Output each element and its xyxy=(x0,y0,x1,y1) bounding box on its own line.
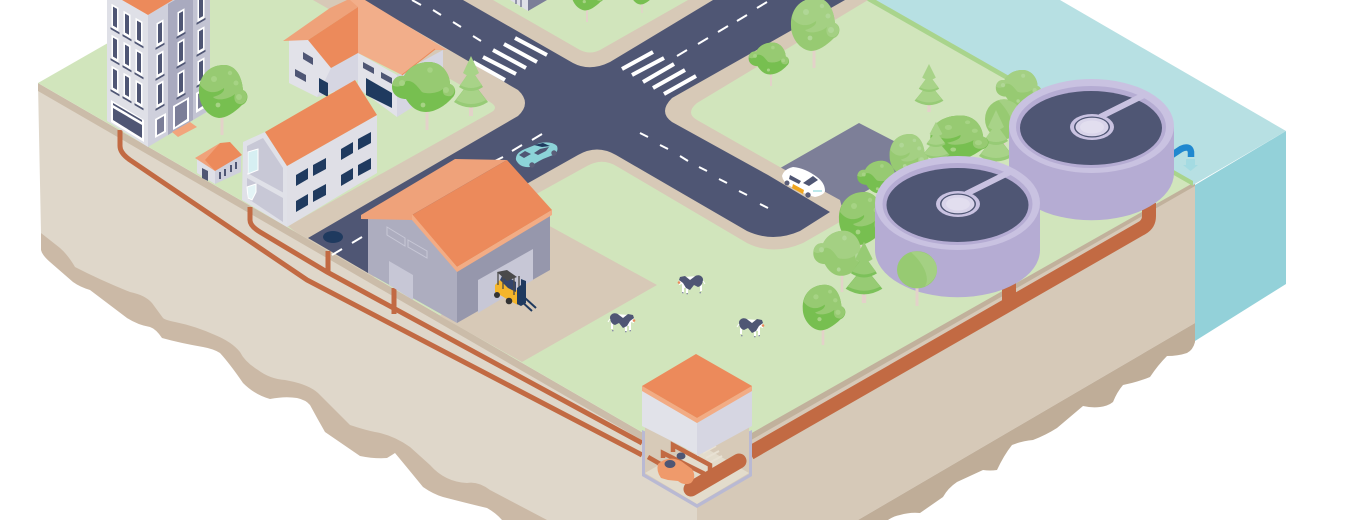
trees: front of tanks xyxy=(803,231,937,345)
section house windows xyxy=(296,132,371,212)
villa door xyxy=(319,78,328,97)
warehouse xyxy=(361,159,552,323)
stairs xyxy=(703,446,722,463)
garden shed xyxy=(195,142,242,184)
pump house roof xyxy=(642,354,752,418)
villa windows xyxy=(295,52,392,84)
right wall top band xyxy=(697,179,1195,471)
pine: villa front xyxy=(454,56,488,116)
manhole xyxy=(323,231,343,243)
pump chamber floor xyxy=(645,443,749,504)
warehouse roof right xyxy=(412,160,552,267)
section house roof xyxy=(265,80,377,166)
tree cluster behind tanks xyxy=(839,70,1041,262)
toilet xyxy=(247,184,256,200)
water basin side xyxy=(1195,131,1286,341)
apartment doormat xyxy=(172,122,197,137)
tree: beside apartment xyxy=(199,65,247,135)
suction pipes xyxy=(648,445,710,479)
shopfront xyxy=(111,100,144,142)
pine: centre field xyxy=(915,64,943,112)
apartment left windows xyxy=(110,3,144,110)
section house cutaway xyxy=(242,132,287,227)
cow: centre xyxy=(678,275,705,294)
pump body xyxy=(657,459,694,484)
pipe branch: warehouse xyxy=(392,288,396,314)
car: white taxi xyxy=(782,167,825,198)
road dashes xyxy=(332,0,768,255)
crosswalk: upper left xyxy=(473,38,547,80)
trees: top block xyxy=(571,0,655,22)
bank strip along water xyxy=(866,0,1193,186)
section house wall xyxy=(287,115,377,227)
main pressure pipe xyxy=(750,203,1149,453)
tree: villa front xyxy=(392,62,455,130)
villa roof xyxy=(283,0,365,41)
cow: right xyxy=(737,318,764,337)
cow: left xyxy=(608,313,635,332)
pipe riser to tank xyxy=(1002,283,1016,305)
pump station xyxy=(642,354,752,508)
pump motors xyxy=(664,460,676,468)
ground surface xyxy=(38,0,1193,464)
warehouse windows xyxy=(387,227,427,258)
outflow pipe into water xyxy=(1172,148,1198,171)
roads xyxy=(308,0,845,273)
settling tank: rear xyxy=(1009,79,1174,220)
tree: upper road small xyxy=(749,42,789,86)
warehouse side door xyxy=(389,261,413,300)
right wall soil xyxy=(697,183,1195,520)
water basin surface xyxy=(870,0,1286,185)
discharge pipe xyxy=(691,461,739,489)
apartment building xyxy=(107,0,210,147)
pipe branch: street inlet xyxy=(326,251,330,273)
villa xyxy=(283,0,447,117)
pavements xyxy=(288,0,868,280)
tree: upper road right xyxy=(791,0,839,68)
forklift xyxy=(494,270,536,311)
left wall top band xyxy=(38,83,697,472)
apartment right face xyxy=(148,0,210,147)
apartment ground floor right xyxy=(155,113,166,138)
crosswalk: upper right xyxy=(622,52,696,94)
pump house right wall xyxy=(697,390,752,456)
pump chamber back wall xyxy=(645,426,749,504)
car: teal hatchback xyxy=(516,142,558,168)
villa garage door xyxy=(366,78,392,108)
sewer pipe from apartment xyxy=(120,130,642,455)
left wall lower strata xyxy=(41,233,600,520)
villa walls xyxy=(289,38,335,97)
shower xyxy=(248,149,258,174)
section house xyxy=(242,80,377,227)
sewer pipe from house xyxy=(250,207,642,443)
section house floors xyxy=(243,172,285,195)
warehouse loading door xyxy=(478,249,533,313)
pump house roof edge xyxy=(642,386,752,423)
forecourt yard xyxy=(440,218,657,362)
apartment left face xyxy=(107,0,148,147)
pump house left wall xyxy=(642,390,697,454)
parking lot xyxy=(768,123,925,212)
right wall lower strata xyxy=(858,323,1195,520)
warehouse roof left xyxy=(361,159,507,220)
left wall soil xyxy=(38,84,697,520)
apartment roof xyxy=(122,0,173,15)
pump chamber frame xyxy=(642,430,752,508)
warehouse roof edge xyxy=(412,210,552,272)
apartment right windows xyxy=(156,0,206,111)
settling tank: front xyxy=(875,156,1040,297)
building behind road xyxy=(510,0,547,11)
